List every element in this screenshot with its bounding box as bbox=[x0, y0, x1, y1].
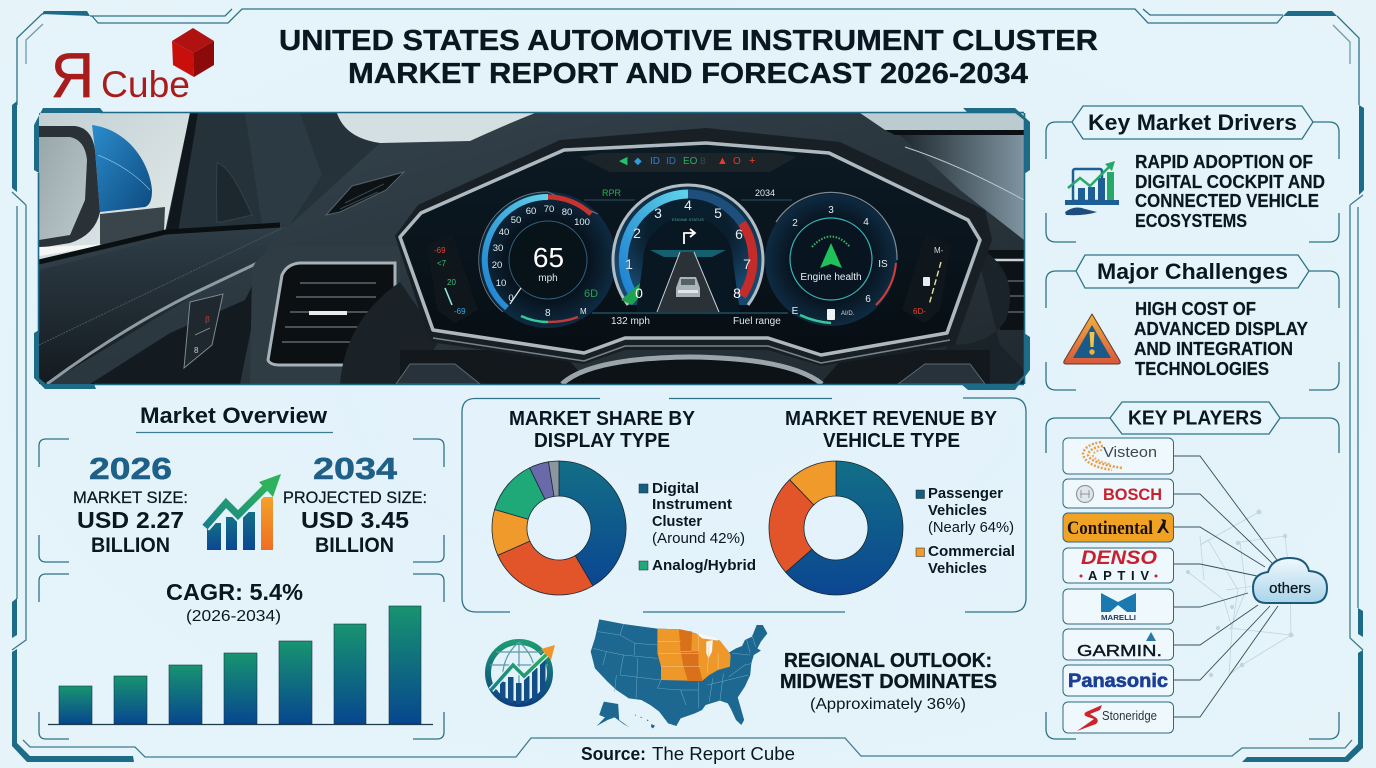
drivers text: ECOSYSTEMS bbox=[1135, 211, 1247, 231]
alaska bbox=[597, 702, 630, 727]
top indicator bar: ▲ bbox=[717, 155, 728, 167]
icon: globe with growth arrow bbox=[488, 642, 555, 710]
stat: 2026 market size bbox=[73, 451, 188, 557]
right gauge: 3 bbox=[828, 205, 834, 216]
panel: market overview bbox=[39, 403, 444, 739]
hero image: car dashboard and digital cluster bbox=[34, 108, 1030, 390]
center gauge: 6 bbox=[735, 226, 743, 242]
top labels: 2034 bbox=[755, 188, 775, 198]
top indicator bar: EO bbox=[683, 156, 698, 167]
left gauge: 0 bbox=[508, 293, 514, 304]
logo wordmark: Cube bbox=[101, 64, 190, 105]
A-pillar bbox=[165, 113, 380, 232]
legend: display type: Instrument bbox=[652, 496, 732, 513]
stat: 2034 projected size: PROJECTED SIZE: bbox=[283, 488, 427, 507]
right gauge bbox=[765, 192, 897, 326]
stat: 2026 market size: MARKET SIZE: bbox=[73, 488, 188, 507]
top labels: RPR bbox=[602, 188, 622, 198]
bottom info bar bbox=[592, 313, 788, 327]
left gauge: 70 bbox=[544, 204, 554, 215]
top labels bbox=[584, 188, 792, 200]
center gauge: ENGINE STATUS bbox=[672, 217, 704, 222]
top indicator bar: ◀ bbox=[619, 155, 628, 167]
center gauge: 1 bbox=[625, 256, 633, 272]
right gauge: IS bbox=[878, 259, 888, 270]
legend: display type: (Around 42%) bbox=[652, 530, 745, 547]
heading: market share by display type: DISPLAY TYPE bbox=[534, 430, 670, 452]
legend: vehicle type: Vehicles bbox=[928, 503, 987, 519]
steering wheel rim left bbox=[340, 282, 440, 384]
title: MARKET REPORT AND FORECAST 2026-2034 bbox=[348, 58, 1028, 90]
right gauge: 2 bbox=[792, 218, 798, 229]
legend: vehicle type: Passenger bbox=[928, 486, 1003, 502]
center gauge: 7 bbox=[743, 256, 751, 272]
left gauge: mph bbox=[538, 273, 558, 284]
regional outlook text: (Approximately 36%) bbox=[810, 696, 966, 713]
connectors to others cloud bbox=[1174, 456, 1278, 717]
left gauge: 65 bbox=[533, 242, 564, 273]
drivers text: RAPID ADOPTION OF bbox=[1135, 152, 1313, 172]
heading: market revenue by vehicle type: VEHICLE TYPE bbox=[823, 430, 960, 452]
bottom info bar: 132 mph bbox=[611, 316, 650, 327]
center gauge: 4 bbox=[684, 197, 692, 213]
stat: 2034 projected size: 2034 bbox=[313, 451, 398, 486]
glow lines bbox=[589, 261, 788, 263]
door switch: ꞵ bbox=[205, 315, 210, 324]
state lines bbox=[593, 624, 756, 708]
midwest region bbox=[657, 629, 731, 681]
drivers bracket bbox=[1046, 122, 1339, 242]
bar chart: cagr growth bbox=[48, 606, 433, 724]
logo icon: red cube bbox=[172, 28, 214, 77]
logo: garmin bbox=[1063, 629, 1174, 660]
bracket: cagr bbox=[39, 574, 444, 739]
logo: visteon bbox=[1063, 438, 1174, 474]
hero image: car dashboard and digital cluster: -69 bbox=[434, 246, 446, 255]
heading: market revenue by vehicle type: MARKET REVENUE BY bbox=[785, 408, 998, 430]
logo: denso aptiv: APTIV bbox=[1088, 568, 1149, 583]
stat: 2034 projected size bbox=[283, 451, 427, 557]
bracket: stats bbox=[39, 439, 444, 562]
legend: vehicle type bbox=[916, 486, 1015, 577]
logo: visteon: Visteon bbox=[1103, 444, 1157, 461]
panel: key market drivers bbox=[1046, 106, 1339, 242]
legend: display type: Analog/Hybrid bbox=[652, 557, 756, 574]
regional outlook text: REGIONAL OUTLOOK: bbox=[784, 650, 992, 672]
logo: RCube bbox=[51, 28, 214, 111]
legend: display type bbox=[639, 480, 756, 574]
right gauge: Engine health bbox=[800, 272, 862, 283]
hero image: car dashboard and digital cluster: 6D- bbox=[913, 307, 926, 316]
stat: 2026 market size: 2026 bbox=[89, 451, 172, 486]
others cloud bbox=[1253, 558, 1327, 603]
hero image: car dashboard and digital cluster: 20 bbox=[447, 278, 456, 287]
icon: warning triangle bbox=[1064, 314, 1120, 364]
steering wheel bbox=[562, 357, 822, 384]
logo: continental: Continental bbox=[1067, 518, 1153, 539]
center gauge: 8 bbox=[733, 285, 741, 301]
right vent bbox=[985, 250, 1024, 330]
left gauge: 60 bbox=[526, 206, 536, 217]
center gauge: 2 bbox=[633, 225, 641, 241]
left gauge: 80 bbox=[562, 207, 572, 218]
cagr label: (2026-2034) bbox=[186, 608, 281, 625]
challenges text: AND INTEGRATION bbox=[1134, 339, 1293, 359]
side panels bbox=[427, 233, 478, 323]
top indicator bar: ID bbox=[666, 156, 676, 167]
challenges text: HIGH COST OF bbox=[1135, 299, 1256, 319]
right gauge: AI/D. bbox=[841, 311, 855, 317]
contiguous states bbox=[591, 619, 767, 726]
players bracket bbox=[1046, 418, 1339, 739]
top dash vent bbox=[326, 172, 404, 215]
center gauge bbox=[613, 185, 763, 312]
side mirror bbox=[39, 125, 165, 256]
title bbox=[279, 25, 1098, 90]
bottom info bar: Fuel range bbox=[733, 316, 781, 327]
hero image: car dashboard and digital cluster: M- bbox=[934, 246, 944, 255]
left gauge: 50 bbox=[511, 215, 521, 226]
challenges text: TECHNOLOGIES bbox=[1135, 359, 1269, 379]
right gauge: 6 bbox=[865, 294, 871, 305]
left gauge: 8 bbox=[545, 308, 551, 319]
logo: garmin: GARMIN. bbox=[1077, 643, 1162, 660]
door panel bbox=[39, 224, 282, 384]
logo: marelli: MARELLI bbox=[1101, 615, 1136, 622]
left window bbox=[39, 113, 190, 262]
left gauge: M bbox=[580, 307, 587, 316]
top indicator bar: + bbox=[749, 155, 755, 167]
great lakes bbox=[696, 633, 718, 658]
icon: digital cockpit growth bbox=[1065, 161, 1119, 215]
top indicator bar bbox=[580, 153, 796, 172]
top indicator bar: ◆ bbox=[634, 156, 642, 167]
others cloud: others bbox=[1269, 580, 1311, 597]
panel: major challenges bbox=[1046, 255, 1339, 390]
logo: stoneridge bbox=[1063, 702, 1174, 733]
top indicator bar: O bbox=[733, 156, 741, 167]
left gauge: 30 bbox=[493, 243, 503, 254]
drivers text bbox=[1135, 152, 1325, 231]
heading: market overview: Market Overview bbox=[140, 403, 328, 428]
regional outlook text: MIDWEST DOMINATES bbox=[780, 671, 997, 693]
source line: Source: bbox=[581, 744, 646, 764]
right gauge: 4 bbox=[863, 217, 869, 228]
drivers text: CONNECTED VEHICLE bbox=[1135, 191, 1319, 211]
logo: marelli bbox=[1063, 589, 1174, 624]
cagr label: CAGR: 5.4% bbox=[166, 579, 303, 605]
hero image: car dashboard and digital cluster: <7 bbox=[437, 259, 447, 268]
logo: stoneridge: Stoneridge bbox=[1102, 708, 1157, 723]
logo: panasonic: Panasonic bbox=[1068, 671, 1168, 692]
left gauge: 40 bbox=[499, 227, 509, 238]
regional outlook text bbox=[780, 650, 997, 713]
left gauge bbox=[479, 192, 616, 328]
logo: denso aptiv bbox=[1063, 548, 1174, 583]
legend: display type: Digital bbox=[652, 480, 699, 497]
center gauge: 5 bbox=[714, 205, 722, 221]
donut chart: display type bbox=[492, 461, 626, 595]
drivers heading badge bbox=[1072, 106, 1313, 139]
darker midwest states bbox=[679, 629, 703, 681]
stat: 2026 market size: BILLION bbox=[91, 534, 170, 557]
drivers text: DIGITAL COCKPIT AND bbox=[1135, 172, 1325, 192]
cagr label bbox=[166, 579, 303, 625]
hero image: car dashboard and digital cluster: -69 bbox=[454, 307, 466, 316]
source line: The Report Cube bbox=[652, 744, 795, 764]
left gauge: 20 bbox=[492, 260, 502, 271]
logo: bosch bbox=[1063, 479, 1174, 508]
logo wordmark: Я bbox=[51, 41, 94, 111]
stat: 2034 projected size: USD 3.45 bbox=[301, 507, 409, 533]
challenges heading badge: Major Challenges bbox=[1097, 259, 1288, 284]
left gauge: 6D bbox=[584, 288, 598, 300]
faint network background bbox=[1186, 510, 1294, 677]
panel: key players bbox=[1046, 402, 1339, 739]
top indicator bar: B bbox=[700, 156, 706, 166]
challenges heading badge bbox=[1076, 255, 1309, 288]
panel outline bbox=[462, 398, 1026, 612]
logo: continental bbox=[1063, 513, 1174, 542]
car bbox=[676, 277, 700, 297]
logo wordmark bbox=[51, 41, 190, 111]
source line bbox=[581, 744, 795, 764]
left gauge: 10 bbox=[496, 278, 506, 289]
logo: denso aptiv: DENSO bbox=[1081, 548, 1157, 569]
right gauge: E bbox=[792, 306, 799, 317]
hood surround bbox=[395, 128, 992, 366]
drivers heading badge: Key Market Drivers bbox=[1088, 110, 1297, 135]
donut chart: vehicle type bbox=[769, 461, 903, 595]
door switch bbox=[184, 294, 223, 368]
silver bezel bbox=[400, 143, 980, 355]
map: united states with midwest highlighted bbox=[591, 619, 767, 728]
center air vent bbox=[250, 256, 396, 384]
stat: 2026 market size: USD 2.27 bbox=[77, 507, 184, 533]
legend: vehicle type: Vehicles bbox=[928, 561, 987, 577]
legend: display type: Cluster bbox=[652, 513, 702, 530]
center gauge: 0 bbox=[635, 285, 643, 301]
door switch: 8 bbox=[194, 346, 199, 355]
hawaii bbox=[635, 714, 655, 728]
icon: growth chart with arrow bbox=[205, 474, 281, 550]
players heading badge bbox=[1110, 402, 1280, 434]
panel: market share and revenue bbox=[462, 398, 1026, 612]
top indicator bar: ID bbox=[650, 156, 660, 167]
heading: market share by display type bbox=[509, 408, 696, 452]
logo: bosch: BOSCH bbox=[1103, 485, 1162, 504]
windshield strips bbox=[337, 113, 535, 143]
challenges bracket bbox=[1046, 271, 1339, 390]
players heading badge: KEY PLAYERS bbox=[1128, 408, 1262, 430]
challenges text bbox=[1134, 299, 1308, 379]
lower button panels bbox=[396, 364, 480, 384]
challenges text: ADVANCED DISPLAY bbox=[1134, 319, 1308, 339]
hero frame corners bbox=[34, 108, 1030, 390]
stat: 2034 projected size: BILLION bbox=[315, 534, 394, 557]
left gauge: 100 bbox=[574, 217, 590, 228]
logo: panasonic bbox=[1063, 665, 1174, 696]
legend: vehicle type: Commercial bbox=[928, 544, 1015, 560]
legend: vehicle type: (Nearly 64%) bbox=[928, 520, 1014, 536]
center gauge: 3 bbox=[654, 205, 662, 221]
heading: market share by display type: MARKET SHARE BY bbox=[509, 408, 696, 430]
heading: market revenue by vehicle type bbox=[785, 408, 998, 452]
title: UNITED STATES AUTOMOTIVE INSTRUMENT CLUSTER bbox=[279, 25, 1098, 57]
